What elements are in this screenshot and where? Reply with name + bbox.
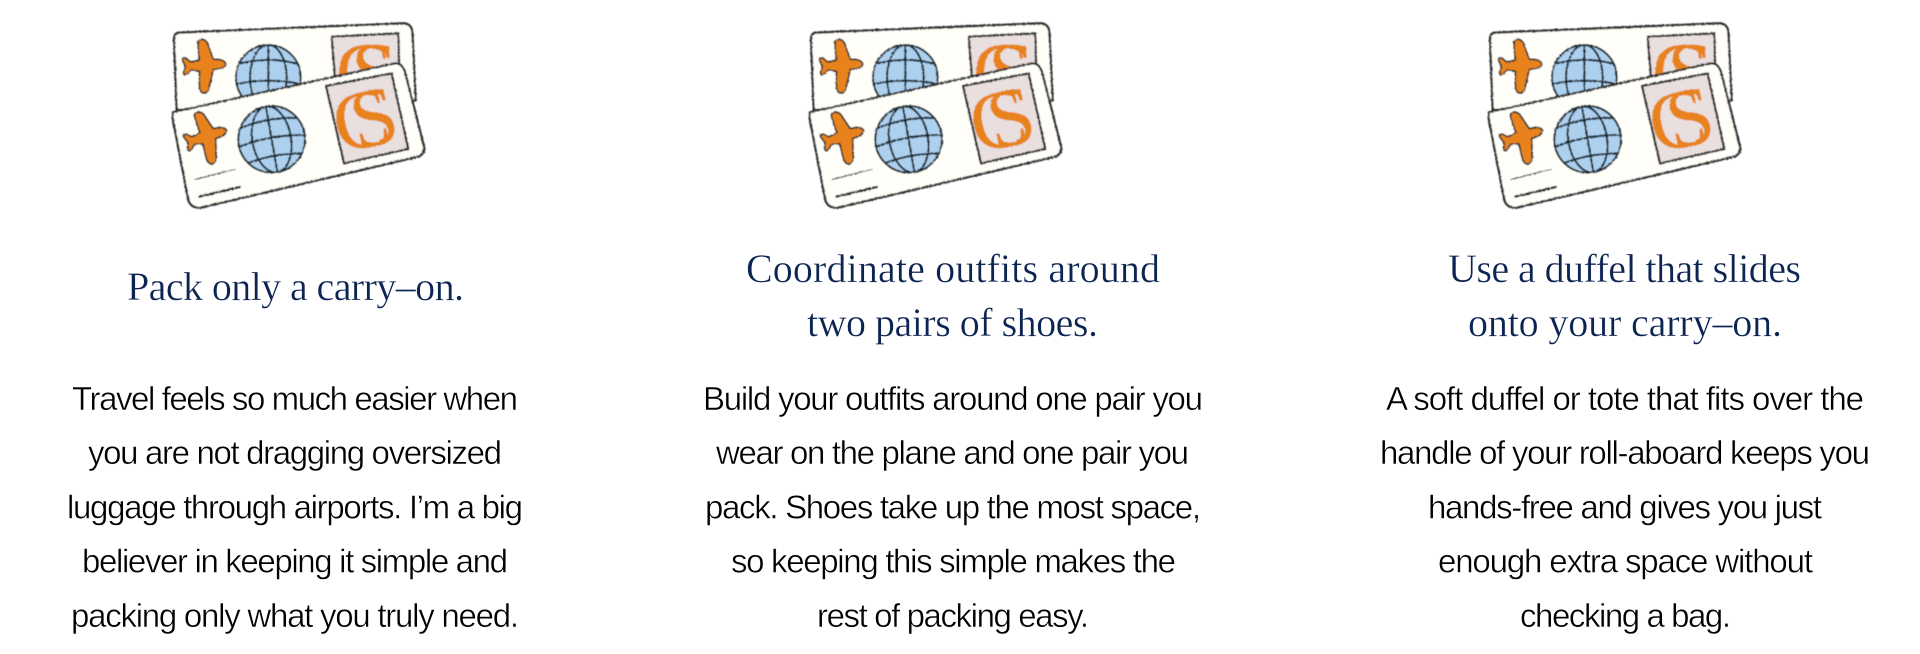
- body text: tip 2: wear on the plane and one pair you: [715, 434, 1189, 471]
- body text: tip 1: luggage through airports. I’m a big: [67, 488, 523, 526]
- icon: boarding passes: S: [342, 68, 406, 168]
- icon: boarding passes: C: [1640, 70, 1714, 172]
- body text: tip 2: Build your outfits around one pair you: [703, 380, 1203, 417]
- heading: coordinate outfits: Coordinate outfits around: [746, 246, 1160, 291]
- body text: tip 3: enough extra space without: [1438, 542, 1813, 580]
- body text: tip 3: hands-free and gives you just: [1428, 488, 1822, 526]
- heading: coordinate outfits: [746, 246, 1160, 345]
- heading: pack only a carry-on: Pack only a carry–on.: [127, 264, 464, 309]
- body text: tip 1: Travel feels so much easier when: [72, 380, 518, 417]
- body text: tip 3: [1380, 380, 1870, 634]
- heading: coordinate outfits: two pairs of shoes.: [807, 300, 1098, 345]
- icon: boarding passes: S: [1658, 68, 1722, 168]
- body text: tip 2: rest of packing easy.: [817, 597, 1089, 634]
- body text: tip 2: [703, 380, 1203, 634]
- icon: boarding passes: C: [1652, 27, 1707, 119]
- icon: boarding passes: S: [1667, 27, 1713, 119]
- body text: tip 3: handle of your roll-aboard keeps you: [1380, 434, 1870, 471]
- icon: boarding passes: S: [351, 27, 397, 119]
- icon: boarding passes: C: [973, 27, 1028, 119]
- body text: tip 3: A soft duffel or tote that fits over the: [1386, 380, 1864, 417]
- icon: boarding passes: [1489, 23, 1740, 208]
- body text: tip 3: checking a bag.: [1520, 597, 1731, 634]
- panel: tip 2 two pairs of shoes: [703, 23, 1203, 634]
- panel: tip 1 carry-on: [67, 23, 523, 634]
- icon: boarding passes: [173, 23, 424, 208]
- icon: boarding passes: C: [324, 70, 398, 172]
- panel: tip 3 duffel: [1380, 23, 1870, 634]
- icon: boarding passes: C: [336, 27, 391, 119]
- icon: boarding passes: S: [979, 68, 1043, 168]
- icon: boarding passes: [810, 23, 1061, 208]
- heading: duffel: onto your carry–on.: [1468, 300, 1782, 345]
- icon: boarding passes: S: [988, 27, 1034, 119]
- body text: tip 2: so keeping this simple makes the: [731, 542, 1176, 580]
- body text: tip 1: you are not dragging oversized: [88, 434, 502, 471]
- heading: duffel: [1448, 246, 1801, 345]
- icon: boarding passes: C: [961, 70, 1035, 172]
- body text: tip 1: believer in keeping it simple and: [82, 542, 508, 580]
- body text: tip 2: pack. Shoes take up the most space,: [705, 488, 1201, 526]
- body text: tip 1: [67, 380, 523, 634]
- body text: tip 1: packing only what you truly need.: [71, 597, 519, 634]
- heading: duffel: Use a duffel that slides: [1448, 246, 1801, 291]
